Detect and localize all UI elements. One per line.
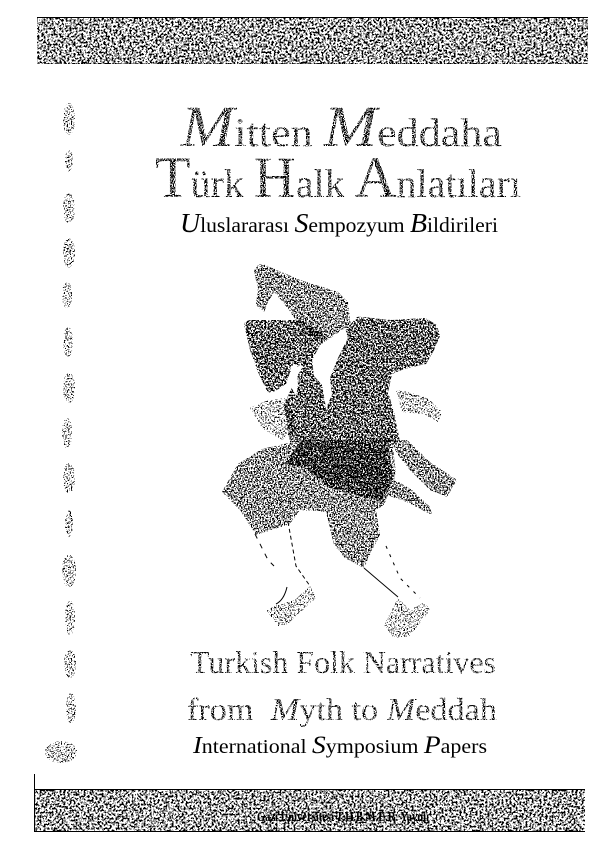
figure: right sleeve and shoulder [340, 316, 440, 442]
figure: sleeve gap [290, 364, 298, 396]
figure: left sleeve and shoulder [244, 320, 326, 393]
figure: hat inner fold [266, 294, 296, 320]
figure: legs and feet [255, 522, 430, 638]
title: Mitten Meddaha: Mitten Meddaha [180, 94, 502, 159]
margin tick line [34, 774, 35, 789]
figure: hat [254, 264, 351, 350]
figure: right trouser [326, 510, 380, 568]
english title: Turkish Folk Narratives: Turkish Folk Narratives [190, 644, 496, 680]
figure: dark centre robe [284, 440, 393, 502]
figure: skirt [222, 440, 396, 535]
figure: face and collar highlight [312, 328, 348, 408]
publisher line: Gazi Üniversitesi T.H.B.M.E.R. Yayını [257, 808, 429, 825]
figure: right hand [396, 390, 442, 422]
subtitle: Uluslararası Sempozyum Bildirileri: Uluslararası Sempozyum Bildirileri [180, 208, 498, 238]
english subtitle: International Symposium Papers: International Symposium Papers [192, 732, 487, 759]
illustration: dancing meddah figure [222, 264, 457, 638]
figure: left hand [250, 398, 296, 440]
title: Türk Halk Anlatıları: Türk Halk Anlatıları [155, 145, 521, 210]
top decorative band [37, 17, 588, 64]
english title: from Myth to Meddah: from Myth to Meddah [187, 691, 497, 727]
figure: sashes [387, 440, 457, 515]
side ornament column [45, 103, 77, 763]
figure: torso [284, 346, 396, 442]
bottom decorative band [34, 789, 585, 832]
